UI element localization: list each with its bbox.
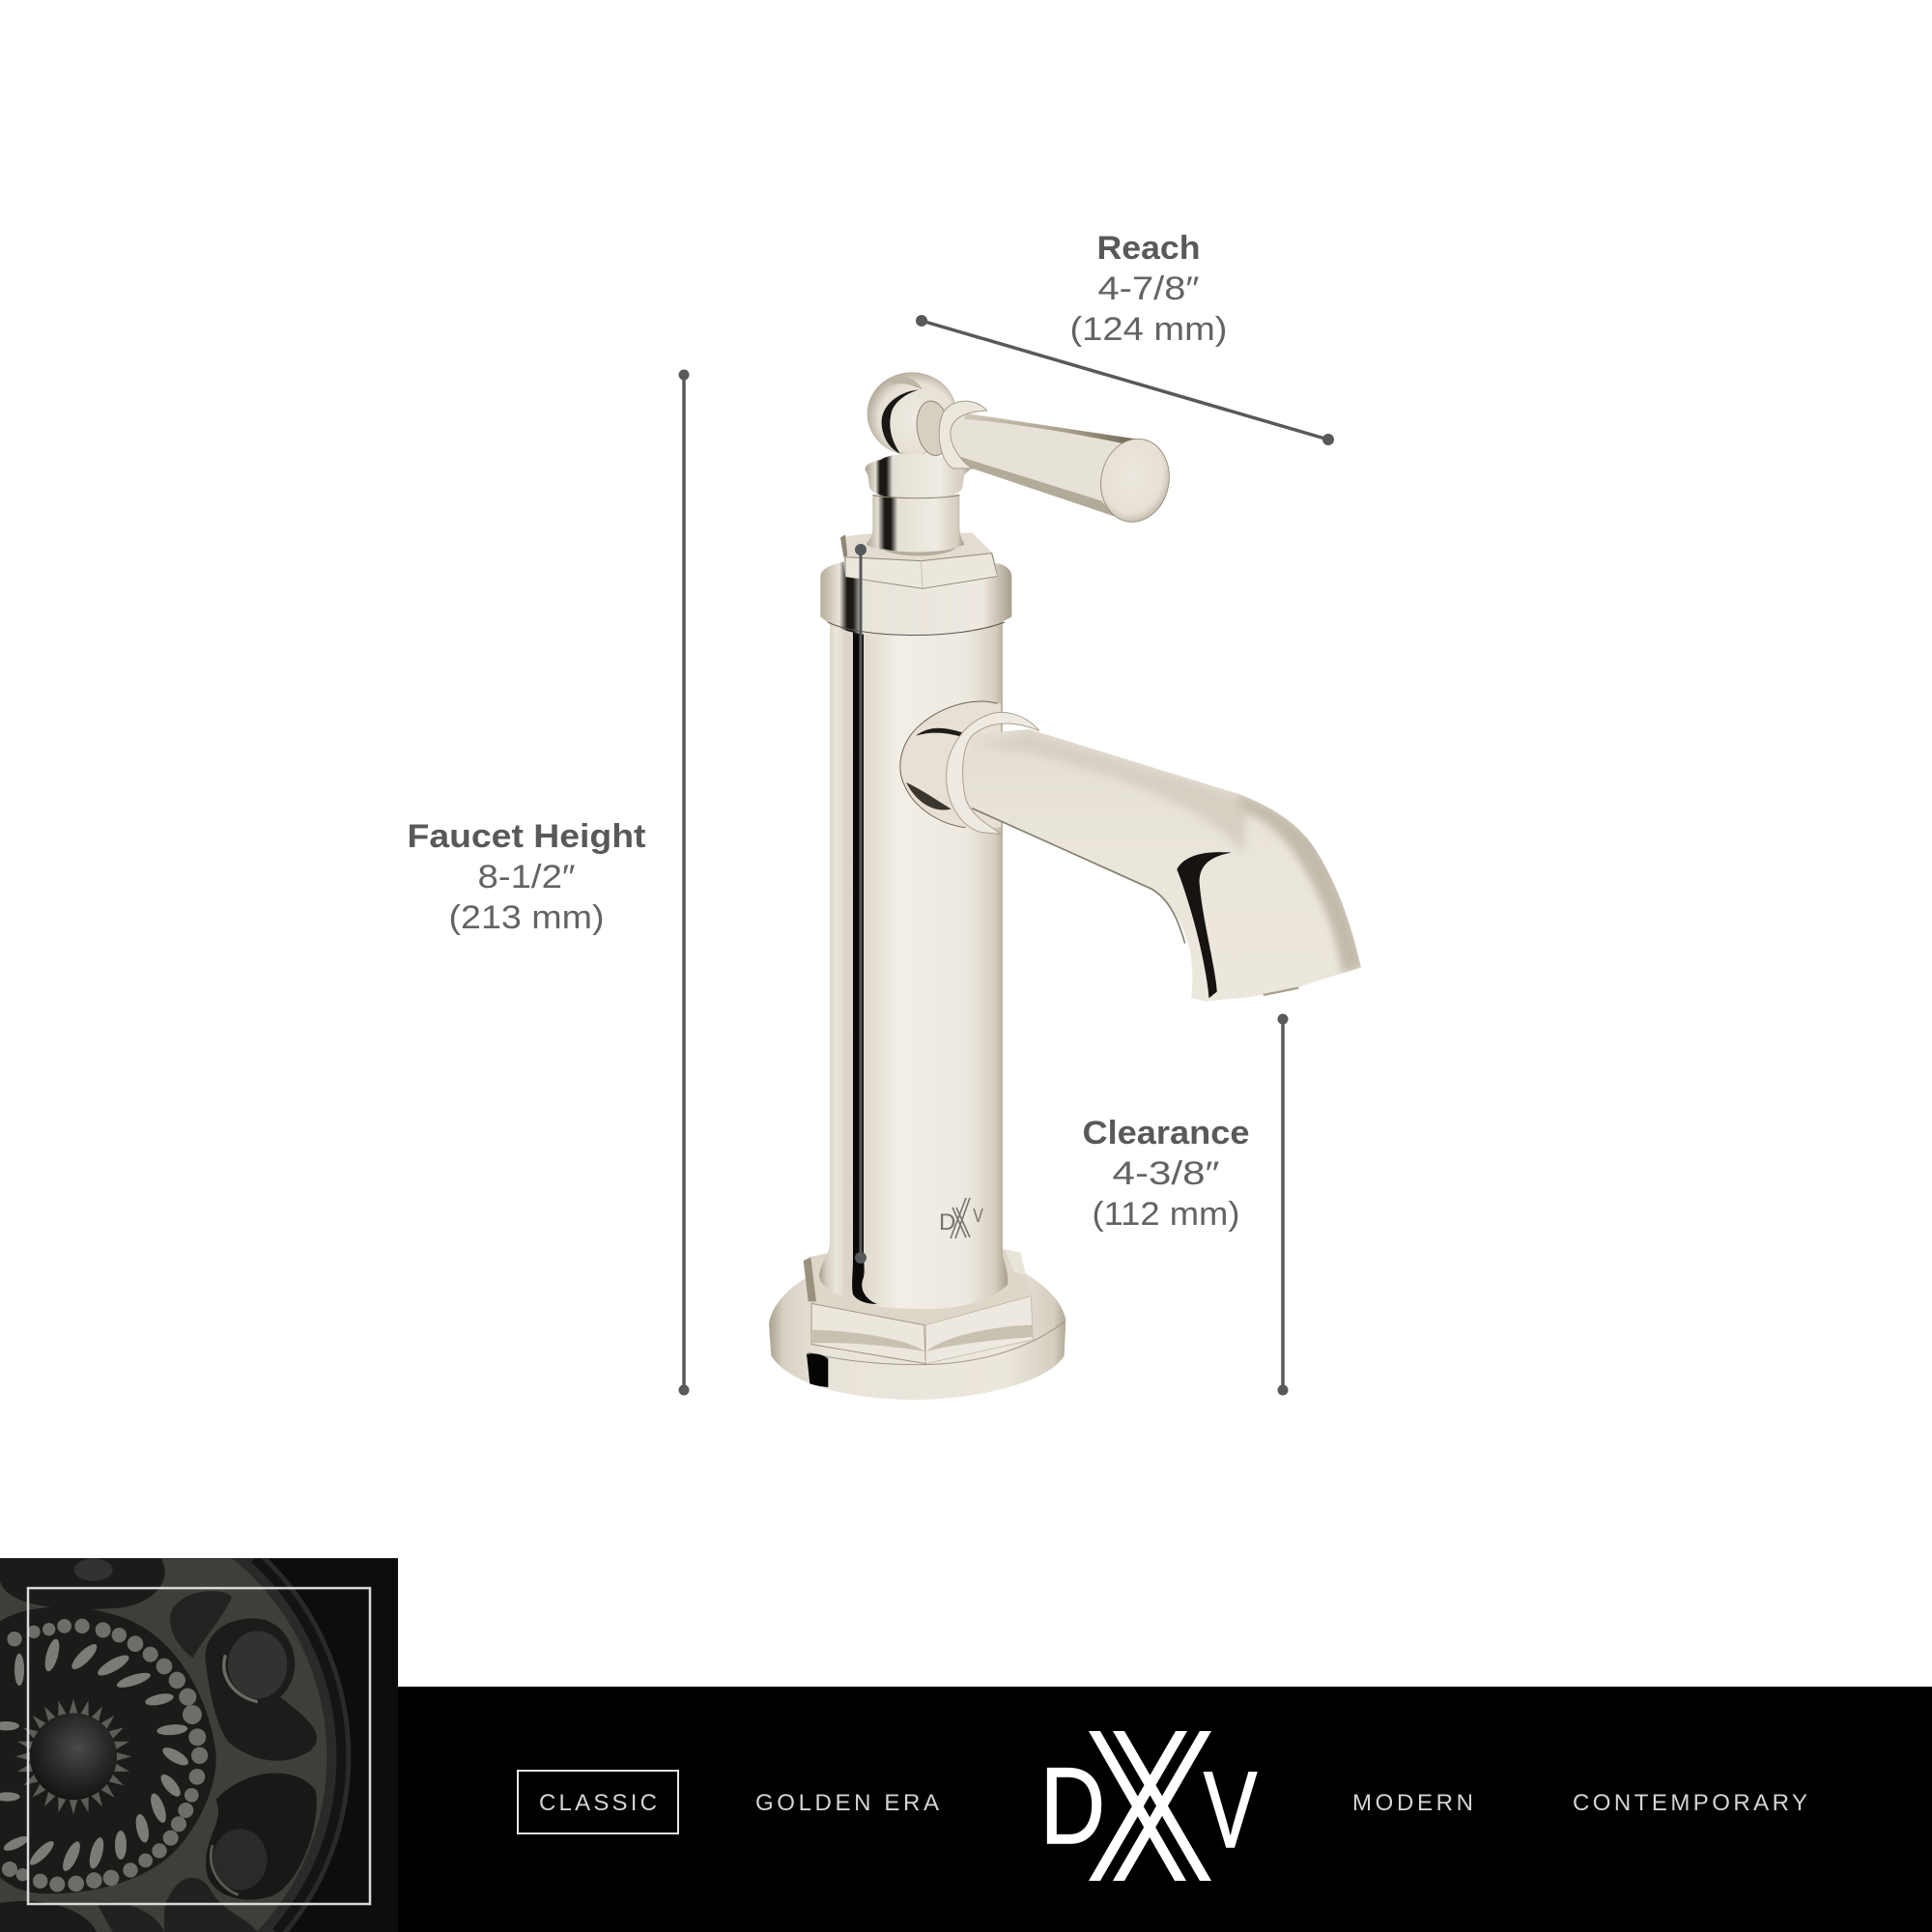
engraved logo on body: V — [973, 1205, 983, 1226]
dimension: inner height guide — [855, 544, 867, 1264]
faucet body — [819, 618, 1008, 1309]
footer band — [0, 1687, 1932, 1932]
neck and lever handle — [866, 373, 1177, 555]
label: clearance: (112 mm) — [1092, 1196, 1240, 1233]
label: reach: (124 mm) — [1070, 311, 1227, 348]
DXV logo — [1040, 1731, 1258, 1881]
dimension: faucet height line — [678, 369, 690, 1395]
style label: golden era: GOLDEN ERA — [755, 1790, 939, 1816]
label: reach: 4-7/8″ — [1097, 270, 1200, 307]
panel: ornamental rosette image — [0, 1558, 398, 1932]
engraved logo on body: D — [939, 1209, 955, 1236]
label: faucet height: 8-1/2″ — [477, 859, 576, 895]
faucet base — [769, 1249, 1065, 1400]
label: reach: Reach — [1097, 230, 1200, 267]
style label: modern: MODERN — [1352, 1790, 1473, 1816]
style label: classic: CLASSIC — [539, 1790, 657, 1816]
style scale: classic selected box — [518, 1771, 678, 1833]
dimension: reach line — [916, 315, 1334, 445]
DXV logo: V — [1204, 1749, 1258, 1870]
label: faucet height: Faucet Height — [408, 818, 645, 855]
label: clearance — [1082, 1115, 1250, 1233]
dimension: clearance line — [1277, 1014, 1289, 1395]
faucet illustration — [769, 373, 1364, 1400]
label: faucet height: (213 mm) — [448, 899, 605, 936]
DXV logo: D — [1040, 1746, 1105, 1866]
label: faucet height — [408, 818, 645, 936]
style label: contemporary: CONTEMPORARY — [1573, 1790, 1807, 1816]
engraved logo on body — [939, 1198, 983, 1238]
label: clearance: 4-3/8″ — [1113, 1155, 1219, 1192]
label: reach — [1070, 230, 1227, 348]
spout — [900, 701, 1364, 1002]
top collar and hex nut — [820, 533, 1011, 635]
label: clearance: Clearance — [1082, 1115, 1250, 1151]
